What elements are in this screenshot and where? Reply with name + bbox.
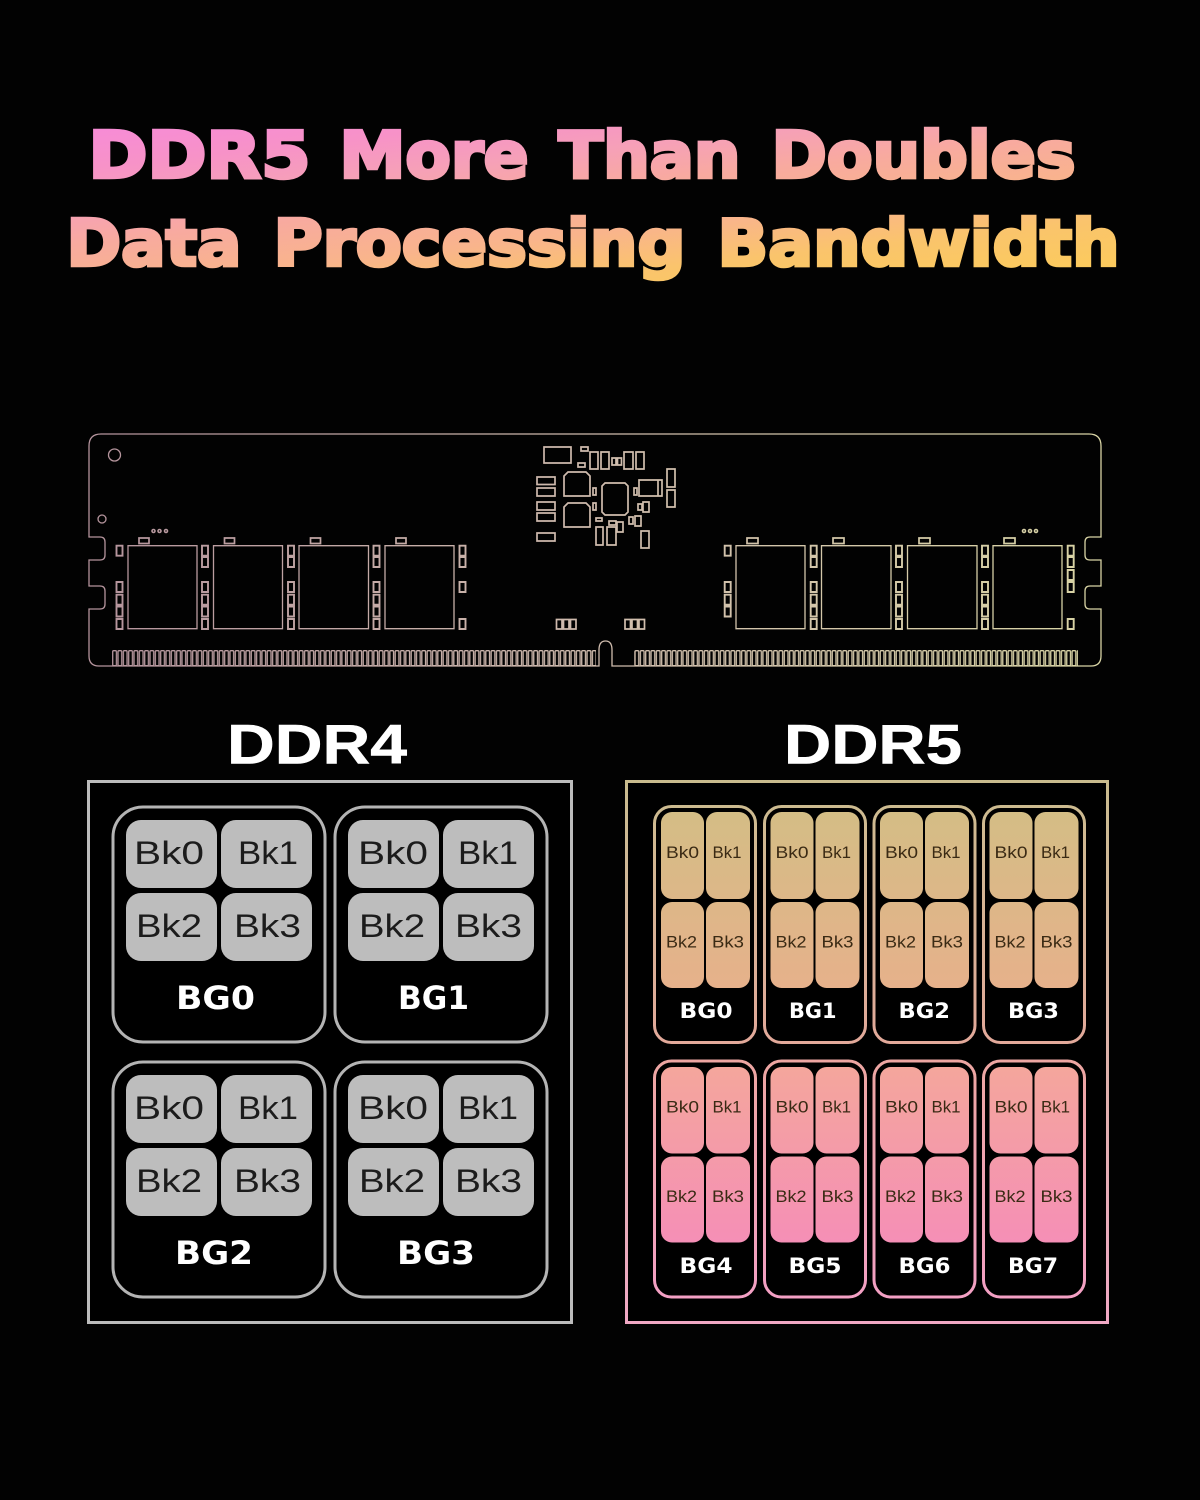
DDR5 bank group BG0: Bk1 xyxy=(712,844,742,862)
title: Than xyxy=(558,118,740,194)
DDR5 bank group BG3: Bk1 xyxy=(1041,844,1070,862)
left memory chips xyxy=(128,546,454,629)
title xyxy=(66,118,1120,282)
DDR5 bank group BG0: Bk0 xyxy=(666,844,699,862)
heading: DDR4: DDR4 xyxy=(227,712,407,776)
DDR5 bank group BG4: Bk2 xyxy=(666,1188,697,1206)
DDR5 bank group BG1: BG1 xyxy=(789,999,836,1024)
DDR5 bank group BG7 xyxy=(984,1061,1084,1297)
DDR5 bank group BG0 xyxy=(654,806,756,1042)
small vias xyxy=(152,530,1038,532)
DDR4 bank group BG3: Bk2 xyxy=(359,1163,425,1199)
DDR5 bank group BG7: Bk1 xyxy=(1041,1098,1070,1116)
title: Data xyxy=(66,206,242,282)
DDR5 bank group BG3: Bk2 xyxy=(994,934,1026,952)
DDR5 bank group BG3: Bk0 xyxy=(994,844,1028,862)
power management components xyxy=(537,447,675,548)
DDR4 bank group BG3: Bk0 xyxy=(358,1090,428,1126)
DDR5 bank group BG7: Bk3 xyxy=(1040,1188,1072,1206)
DDR5 bank group BG1: Bk3 xyxy=(822,934,854,952)
title: Processing xyxy=(274,206,686,282)
DDR4 bank group BG2: Bk0 xyxy=(134,1090,204,1126)
DDR5 bank group BG5: Bk1 xyxy=(822,1098,851,1116)
DDR5 bank group BG6: Bk0 xyxy=(885,1098,918,1116)
side capacitors xyxy=(116,546,1074,629)
DDR5 bank group BG4: Bk3 xyxy=(712,1188,744,1206)
chip top capacitors xyxy=(139,538,1015,544)
DDR4 bank group BG1: Bk3 xyxy=(455,908,522,944)
DDR4 bank group BG0: Bk1 xyxy=(238,835,298,871)
DDR4 bank group BG0: Bk0 xyxy=(134,835,204,871)
DDR5 bank group BG1 xyxy=(764,806,866,1042)
DDR5 bank group BG6 xyxy=(874,1061,975,1297)
DDR4 bank group BG2 xyxy=(113,1062,325,1297)
DDR4 bank group BG3 xyxy=(335,1062,547,1297)
edge connector pins xyxy=(112,650,1078,666)
centre resistor groups xyxy=(556,620,644,629)
DDR4 bank group BG0: Bk2 xyxy=(136,908,202,944)
DDR5 bank group BG2: Bk3 xyxy=(931,934,963,952)
DDR5 bank group BG5: Bk0 xyxy=(776,1098,808,1116)
DDR5 bank group BG0: Bk3 xyxy=(712,934,744,952)
DDR5 bank group BG3 xyxy=(984,806,1084,1042)
DDR5 bank group BG6: Bk2 xyxy=(885,1188,916,1206)
DDR5 bank group BG0: Bk2 xyxy=(666,934,697,952)
DDR4 bank group BG1: BG1 xyxy=(398,979,469,1017)
DDR4 bank group BG1 xyxy=(335,807,547,1042)
DDR4 bank group BG2: BG2 xyxy=(175,1234,253,1272)
DDR4 bank group BG1: Bk2 xyxy=(359,908,425,944)
DDR4 bank group BG2: Bk3 xyxy=(234,1163,301,1199)
panel: DDR5 xyxy=(626,782,1108,1322)
DDR4 bank group BG2: Bk2 xyxy=(136,1163,202,1199)
heading: DDR5: DDR5 xyxy=(784,712,962,776)
DDR5 bank group BG5: Bk3 xyxy=(822,1188,854,1206)
module board outline xyxy=(89,434,1101,666)
DDR5 bank group BG3: BG3 xyxy=(1008,999,1059,1024)
DDR5 bank group BG3: Bk3 xyxy=(1040,934,1072,952)
DDR4 bank group BG3: Bk1 xyxy=(458,1090,518,1126)
DDR5 bank group BG4: Bk1 xyxy=(712,1098,742,1116)
DDR4 bank group BG0 xyxy=(113,807,325,1042)
DDR4 bank group BG3: Bk3 xyxy=(455,1163,522,1199)
DDR5 bank group BG2: Bk1 xyxy=(932,844,960,862)
DDR5 bank group BG6: BG6 xyxy=(898,1254,950,1279)
DDR4 bank group BG0: BG0 xyxy=(176,979,255,1017)
DDR5 bank group BG1: Bk2 xyxy=(776,934,806,952)
title: More xyxy=(340,118,528,194)
right memory chips xyxy=(736,546,1062,629)
DDR5 bank group BG4: Bk0 xyxy=(666,1098,699,1116)
DDR5 bank group BG6: Bk3 xyxy=(931,1188,963,1206)
DDR5 bank group BG2: Bk2 xyxy=(885,934,916,952)
DDR5 bank group BG0: BG0 xyxy=(680,999,732,1024)
DDR4 bank group BG2: Bk1 xyxy=(238,1090,298,1126)
memory module outline diagram xyxy=(89,434,1101,666)
DDR5 bank group BG6: Bk1 xyxy=(932,1098,960,1116)
DDR5 bank group BG7: Bk0 xyxy=(994,1098,1028,1116)
DDR5 bank group BG2 xyxy=(874,806,975,1042)
DDR5 bank group BG2: BG2 xyxy=(898,999,950,1024)
DDR5 bank group BG4 xyxy=(654,1061,756,1297)
title: DDR5 xyxy=(88,118,310,194)
DDR5 bank group BG4: BG4 xyxy=(680,1254,732,1279)
DDR5 bank group BG7: BG7 xyxy=(1008,1254,1058,1279)
DDR5 bank group BG1: Bk0 xyxy=(776,844,808,862)
mounting holes xyxy=(98,449,120,523)
DDR5 bank group BG2: Bk0 xyxy=(885,844,918,862)
DDR4 bank group BG1: Bk1 xyxy=(458,835,518,871)
DDR5 bank group BG5: BG5 xyxy=(788,1254,842,1279)
title: Bandwidth xyxy=(718,206,1120,282)
DDR5 bank group BG7: Bk2 xyxy=(994,1188,1026,1206)
DDR4 bank group BG3: BG3 xyxy=(397,1234,475,1272)
panel: DDR4 xyxy=(88,782,572,1322)
DDR5 bank group BG5 xyxy=(764,1061,866,1297)
DDR5 bank group BG1: Bk1 xyxy=(822,844,851,862)
DDR4 bank group BG0: Bk3 xyxy=(234,908,301,944)
title: Doubles xyxy=(772,118,1076,194)
DDR5 bank group BG5: Bk2 xyxy=(776,1188,806,1206)
DDR4 bank group BG1: Bk0 xyxy=(358,835,428,871)
